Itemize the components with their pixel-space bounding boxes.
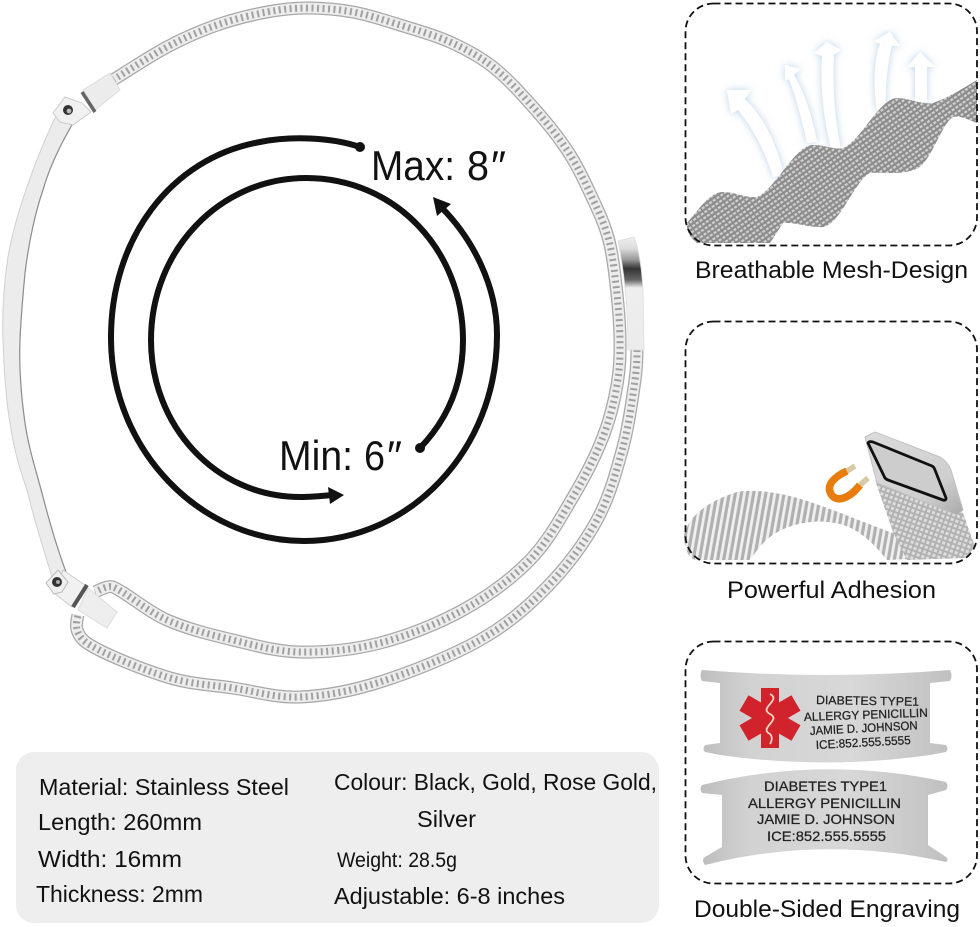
label: min: 6 [364, 432, 385, 479]
spec: colour continued: Silver [417, 806, 476, 832]
spec: colour: Colour: Black, Gold, Rose Gold, [334, 769, 657, 795]
icon: magnet [829, 466, 868, 499]
label: max: Max: [371, 142, 455, 189]
bottom connector [46, 570, 117, 628]
panel: double-sided engraving [686, 642, 977, 884]
spec: adjustable: Adjustable: 6-8 inches [334, 883, 565, 909]
label: min: ″ [387, 432, 402, 479]
spec: length: Length: 260mm [38, 809, 202, 835]
clasp plate [865, 432, 963, 515]
back engraving: DIABETES TYPE1 [764, 778, 887, 794]
size diagram: arrows and labels [111, 138, 506, 541]
label: max [371, 142, 506, 189]
bracelet [3, 8, 644, 697]
tag: front [700, 670, 952, 762]
spec: weight: Weight: 28.5g [337, 849, 457, 872]
spec: thickness: Thickness: 2mm [36, 881, 203, 907]
top connector [53, 73, 120, 125]
panel: powerful adhesion [684, 322, 977, 564]
spec: material: Material: Stainless Steel [39, 774, 289, 800]
airflow arrows [727, 32, 935, 177]
back engraving: ICE:852.555.5555 [767, 828, 886, 844]
icon: medical star [740, 688, 800, 748]
clasp magnet outline [868, 442, 946, 500]
clasp mesh [875, 480, 975, 560]
back engraving [748, 778, 901, 844]
label: max: 8 [467, 142, 489, 189]
panel: specifications [16, 752, 659, 923]
spec: width: Width: 16mm [38, 846, 182, 872]
caption: adhesion: Powerful Adhesion [727, 577, 936, 604]
front engraving: JAMIE D. JOHNSON [809, 718, 918, 738]
front engraving: ALLERGY PENICILLIN [804, 706, 928, 724]
mesh strap [684, 491, 933, 560]
mesh strand: upper [95, 8, 620, 652]
tag: back [700, 769, 948, 865]
left metal bar [3, 116, 76, 577]
caption: engraving: Double-Sided Engraving [694, 896, 960, 923]
mesh wave [687, 80, 977, 243]
mesh strand: lower [76, 350, 637, 697]
back engraving: ALLERGY PENICILLIN [748, 795, 901, 811]
front engraving: DIABETES TYPE1 [816, 693, 920, 709]
right slider clasp [618, 237, 644, 350]
label: min [279, 432, 402, 479]
label: min: Min: [279, 432, 353, 479]
label: max: ″ [491, 142, 506, 189]
front engraving: ICE:852.555.5555 [815, 733, 911, 752]
panel: breathable mesh [686, 4, 977, 246]
inner arc arrow: min 6 inches [151, 178, 463, 504]
front engraving [804, 693, 928, 752]
caption: breathable: Breathable Mesh-Design [695, 257, 968, 284]
back engraving: JAMIE D. JOHNSON [757, 811, 895, 827]
outer arc arrow: max 8 inches [111, 138, 497, 541]
